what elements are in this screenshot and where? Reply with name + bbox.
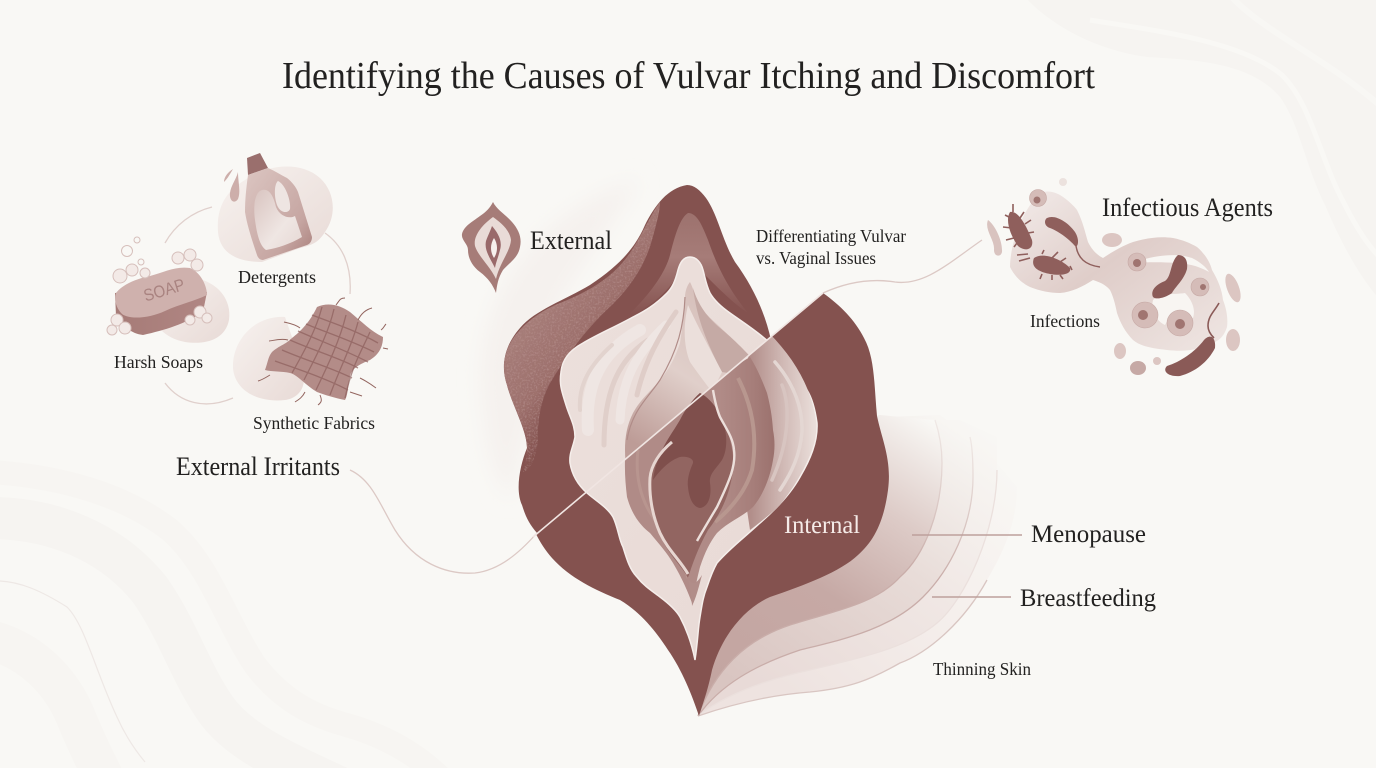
icon: infectious agents <box>987 178 1244 376</box>
fold right tone <box>693 288 748 373</box>
fan layer 4 <box>698 420 1017 716</box>
lower tail fold <box>688 575 702 606</box>
soap backdrop blob <box>154 277 229 343</box>
cell nuclei <box>1034 196 1206 329</box>
leader line: menopause <box>912 534 1022 536</box>
icon: detergent bottle <box>218 153 333 262</box>
label: detergents: Detergents <box>238 267 316 287</box>
pale fold edge left <box>650 442 688 574</box>
label: breastfeeding: Breastfeeding <box>1020 585 1156 612</box>
right outer band below split <box>747 336 812 530</box>
external half (upper) <box>504 185 771 533</box>
bacterium: large rod <box>1165 337 1215 376</box>
pale fold edge right <box>697 390 734 541</box>
cells <box>1030 190 1209 336</box>
small icon centre <box>486 226 501 268</box>
upper petal streaks <box>580 312 676 445</box>
fabric sheet <box>265 305 383 400</box>
fan layer 2 <box>698 415 973 716</box>
worm line <box>1208 303 1219 338</box>
leader line: breastfeeding <box>932 596 1011 598</box>
fan layer 1 <box>698 415 942 716</box>
small icon core <box>491 238 497 258</box>
drips <box>224 169 239 202</box>
label: differentiating vulvar vs vaginal issues: Differentiating Vulvar <box>756 226 906 246</box>
label: thinning skin: Thinning Skin <box>933 659 1031 679</box>
fold left shadow line <box>627 297 685 440</box>
label: external irritants: External Irritants <box>176 452 340 481</box>
label: menopause: Menopause <box>1031 521 1146 548</box>
bacterium: central rod <box>1152 255 1187 298</box>
label: synthetic fabrics: Synthetic Fabrics <box>253 413 375 433</box>
icon: soap bar <box>107 237 229 343</box>
internal half (lower) <box>536 293 889 716</box>
ribbon <box>1010 192 1227 351</box>
small icon pale <box>475 217 511 279</box>
fabric loose fibres <box>258 298 388 405</box>
ribbon hollow <box>1152 293 1194 325</box>
label: infections: Infections <box>1030 311 1100 331</box>
soap side <box>115 290 207 335</box>
bottle cap <box>247 153 268 175</box>
fan layer edges <box>698 420 997 716</box>
dark swirl core <box>653 393 726 508</box>
soft wash behind external half <box>481 180 640 500</box>
central diagram <box>504 185 889 716</box>
connector arcs around external irritants <box>165 207 350 404</box>
bottle handle gap <box>275 181 290 212</box>
pale outer petals <box>560 257 817 660</box>
middle fold lower <box>625 357 774 603</box>
small icon outer <box>462 202 521 293</box>
dark central area <box>650 393 733 578</box>
middle fold upper <box>625 282 727 458</box>
fabric backdrop blob <box>233 317 304 400</box>
background swirl: bottom left <box>0 472 460 768</box>
split line between external and internal <box>533 293 823 537</box>
bottle body <box>245 168 312 260</box>
floating droplets <box>987 178 1244 375</box>
background swirl: top right <box>1023 0 1376 305</box>
title: Identifying the Causes of Vulvar Itching and Discomfort <box>282 55 1095 97</box>
fan layer 3 <box>698 420 997 716</box>
label: harsh soaps: Harsh Soaps <box>114 352 203 372</box>
right band streaks <box>772 362 802 490</box>
connector: external irritants to diagram <box>350 470 536 573</box>
bacterium: rod with tail <box>1045 217 1100 267</box>
bacterium: lower spiky <box>1017 250 1072 280</box>
label: external: External <box>530 226 612 255</box>
textured outer edge <box>504 202 660 472</box>
gap between ribbon bands <box>1133 255 1209 272</box>
fold lighter bands <box>637 378 754 578</box>
fabric weave <box>275 307 378 398</box>
connector: differentiating label <box>823 240 982 293</box>
soap word: SOAP <box>141 275 187 305</box>
icon: synthetic fabric <box>233 298 388 405</box>
label: infectious agents: Infectious Agents <box>1102 193 1273 222</box>
fold pale centre <box>685 305 722 392</box>
internal fan layers <box>698 415 1017 716</box>
label: internal: Internal <box>784 512 860 539</box>
soap bubbles <box>107 237 212 335</box>
label: differentiating vulvar vs vaginal issues: vs. Vaginal Issues <box>756 248 876 268</box>
icon: small external diagram <box>462 202 521 293</box>
soap top <box>115 268 207 318</box>
bottle label <box>254 190 302 250</box>
bottle backdrop blob <box>218 166 333 262</box>
bacterium: upper spiky <box>1003 204 1034 249</box>
upper mid-tone ridge <box>625 213 748 318</box>
